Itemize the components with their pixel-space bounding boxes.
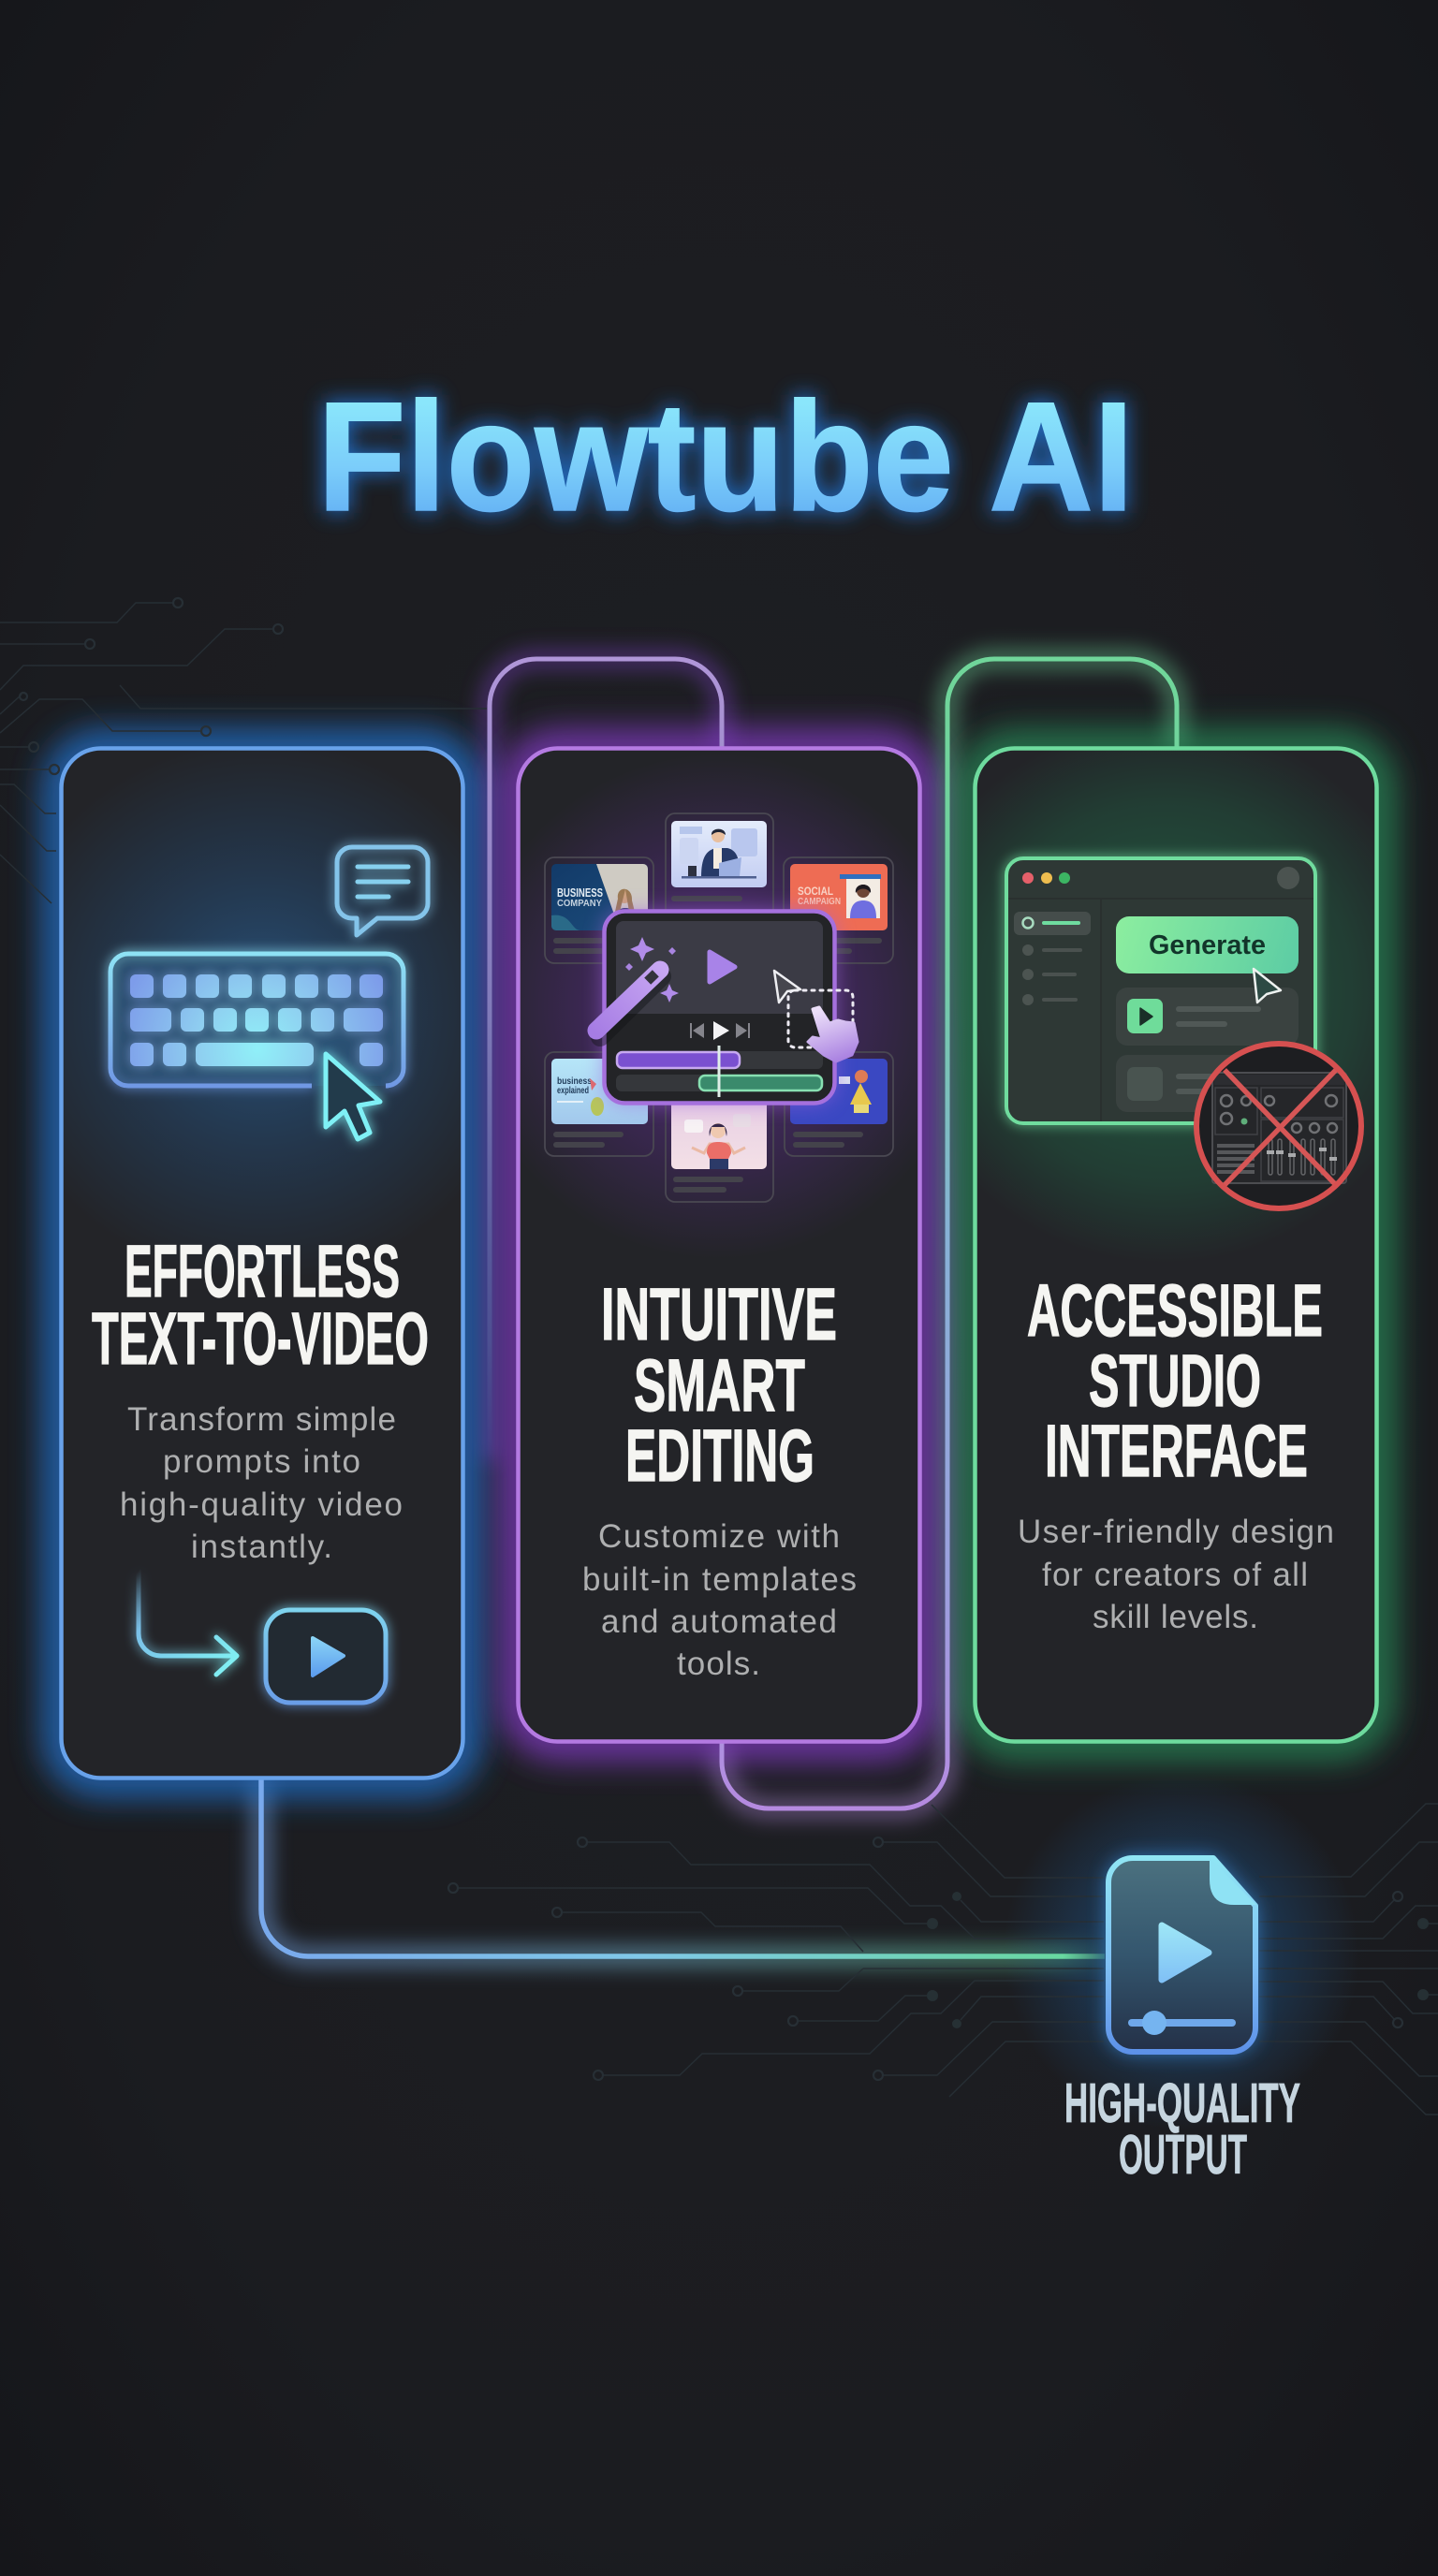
icon: video play	[266, 1610, 386, 1703]
text: description: Customize with	[598, 1518, 840, 1555]
text: description: for creators of all	[1042, 1557, 1308, 1593]
title: Flowtube AI	[317, 371, 1134, 544]
glow layer behind panels	[62, 659, 1376, 2130]
thumbnail: business: BUSINESS	[557, 886, 603, 900]
thumbnail: explainer	[551, 1059, 648, 1124]
editor window	[596, 911, 858, 1104]
text: description: and automated	[601, 1603, 837, 1640]
play triangle	[710, 952, 735, 982]
text: description	[1018, 1514, 1334, 1635]
thumbnail: explainer: business	[557, 1076, 592, 1087]
thumbnail: explainer: explained	[557, 1086, 589, 1096]
text: description	[120, 1401, 403, 1565]
timeline tracks	[616, 1046, 823, 1097]
icon: output video file	[1108, 1858, 1256, 2052]
thumbnail: business: COMPANY	[557, 899, 602, 909]
circuit traces: top left	[0, 598, 487, 903]
title: Flowtube AI	[317, 371, 1134, 544]
text: description	[582, 1518, 857, 1682]
text: description: prompts into	[163, 1443, 360, 1480]
thumbnail: woman with speech bubbles	[671, 1100, 767, 1169]
thumbnail: presenter	[671, 821, 767, 887]
playback controls	[691, 1021, 749, 1040]
text: description: skill levels.	[1093, 1599, 1258, 1635]
text: description: built-in templates	[582, 1561, 857, 1598]
icon: cursor	[326, 1054, 380, 1139]
connector: purple loop behind smart editing panel	[490, 659, 722, 1460]
heading: SMART	[634, 1343, 805, 1427]
icon: crossed-out mixer	[1195, 1042, 1363, 1210]
button: generate: Generate	[1149, 930, 1266, 960]
sidebar	[1014, 912, 1091, 1005]
heading	[1027, 1268, 1323, 1492]
heading: TEXT-TO-VIDEO	[92, 1296, 429, 1380]
label: high-quality output	[1064, 2072, 1300, 2186]
thumbnail: blue character	[790, 1059, 888, 1124]
thumbnail: business	[551, 864, 648, 930]
row: placeholder item	[1116, 1055, 1299, 1112]
heading	[601, 1272, 837, 1497]
heading	[92, 1229, 429, 1380]
icon: speech bubble	[337, 847, 428, 935]
panel: effortless text-to-video	[62, 749, 462, 1778]
button: generate	[1116, 916, 1299, 973]
thumbnail: social	[790, 864, 888, 930]
text: description: instantly.	[191, 1529, 332, 1565]
app window	[1006, 858, 1315, 1123]
icon: selection cursor and hand	[774, 971, 858, 1061]
connector: smart editing panel to studio panel	[722, 659, 1177, 1808]
heading: EDITING	[625, 1413, 814, 1497]
icon: cursor	[1254, 969, 1281, 1003]
thumbnail: social: SOCIAL	[798, 885, 833, 898]
icon: keyboard	[110, 954, 404, 1086]
panel: intuitive smart editing	[519, 749, 919, 1741]
text: description: high-quality video	[120, 1486, 403, 1523]
text: description: tools.	[677, 1646, 760, 1682]
heading: INTUITIVE	[601, 1272, 837, 1355]
heading: STUDIO	[1089, 1339, 1261, 1422]
label: high-quality output: OUTPUT	[1119, 2124, 1247, 2186]
heading: EFFORTLESS	[125, 1229, 400, 1312]
text: description: User-friendly design	[1018, 1514, 1334, 1550]
row: video item	[1116, 988, 1299, 1046]
text: description: Transform simple	[127, 1401, 396, 1438]
template gallery	[545, 813, 893, 1202]
thumbnail: social: CAMPAIGN	[798, 897, 841, 907]
arrow	[139, 1571, 237, 1675]
panel: accessible studio interface	[976, 749, 1376, 1741]
circuit traces: lower middle and right	[448, 1804, 1438, 2115]
connector: text-to-video panel to output file	[261, 1778, 1105, 1956]
icon: magic wand	[596, 937, 679, 1037]
